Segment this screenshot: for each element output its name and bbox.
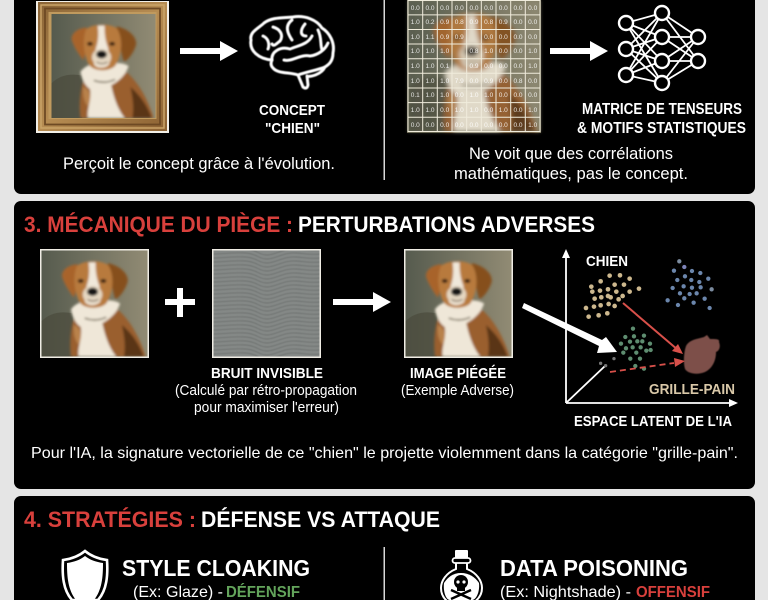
tensor matrix over dog: 0.0 xyxy=(499,122,508,129)
tensor matrix over dog: 0.8 xyxy=(455,19,464,26)
tensor matrix over dog: 1.0 xyxy=(469,92,479,99)
tensor matrix over dog: 0.0 xyxy=(484,34,494,41)
tensor matrix over dog: 1.0 xyxy=(411,107,420,114)
tensor matrix over dog: 0.0 xyxy=(411,122,420,129)
label: latent space: ESPACE LATENT DE L'IA xyxy=(574,413,732,430)
tensor matrix over dog: 0.0 xyxy=(499,92,508,99)
tensor matrix over dog: 0.0 xyxy=(440,107,450,114)
tensor matrix over dog: 1.0 xyxy=(528,48,538,55)
arrow: painting to brain xyxy=(180,41,238,61)
tensor matrix over dog: 0.0 xyxy=(528,5,538,12)
tensor matrix over dog: 1.0 xyxy=(425,63,435,70)
label: concept chien xyxy=(259,102,325,137)
label: concept chien: "CHIEN" xyxy=(265,120,320,137)
label: toaster: GRILLE-PAIN xyxy=(649,382,735,398)
tensor matrix over dog: 0.9 xyxy=(469,19,479,26)
label: tensor matrix xyxy=(577,101,746,137)
framed dog painting xyxy=(36,1,169,133)
label: tensor matrix: MATRICE DE TENSEURS xyxy=(582,101,742,118)
tensor matrix over dog: 0.2 xyxy=(425,19,435,26)
label: chien cluster: CHIEN xyxy=(586,254,628,270)
cluster: blue dots xyxy=(665,259,714,310)
arrow: red trajectory xyxy=(623,303,683,354)
tensor matrix over dog: 0.0 xyxy=(513,5,523,12)
tensor matrix over dog: 1.0 xyxy=(484,92,494,99)
icon: poison flask xyxy=(441,550,482,600)
arrow: dashed red trajectory xyxy=(610,358,685,372)
text: machine perception xyxy=(454,144,688,183)
tensor matrix over dog: 0.0 xyxy=(528,19,538,26)
icon: brain xyxy=(251,17,333,88)
tensor matrix over dog: 0.0 xyxy=(484,122,494,129)
text: human perception: Perçoit le concept grâce à l'évolution. xyxy=(63,154,335,173)
tensor matrix over dog: 0.9 xyxy=(499,19,508,26)
icon: neural network xyxy=(619,6,705,90)
tensor matrix over dog: 0.9 xyxy=(469,63,479,70)
panel: strategies xyxy=(14,496,755,600)
tensor matrix over dog: 0.0 xyxy=(499,5,508,12)
tensor matrix over dog: 0.0 xyxy=(528,78,538,85)
tensor matrix over dog: 1.0 xyxy=(484,48,494,55)
tensor matrix over dog: 1.0 xyxy=(440,78,450,85)
heading: section 3 xyxy=(24,212,595,237)
icon: shield xyxy=(63,551,107,600)
text: data poisoning: DATA POISONING xyxy=(500,555,688,581)
tensor matrix over dog: 1.0 xyxy=(411,48,420,55)
tensor matrix over dog: 0.0 xyxy=(455,92,464,99)
trapped dog image xyxy=(404,249,513,358)
label: trapped image: (Exemple Adverse) xyxy=(401,383,514,399)
tensor matrix over dog: 0.0 xyxy=(513,122,523,129)
arrow: matrix to network xyxy=(550,41,608,61)
label: concept chien: CONCEPT xyxy=(259,102,325,119)
tensor matrix over dog: 1.0 xyxy=(469,107,479,114)
tensor matrix over dog: 0.8 xyxy=(469,48,479,55)
tensor matrix over dog: 0.9 xyxy=(484,78,494,85)
tensor matrix over dog: 0.0 xyxy=(411,5,420,12)
tensor matrix over dog: 0.0 xyxy=(484,5,494,12)
text: machine perception: mathématiques, pas le concept. xyxy=(454,164,688,183)
text: style cloaking: STYLE CLOAKING xyxy=(122,555,310,581)
tensor matrix over dog: 0.9 xyxy=(440,19,450,26)
tensor matrix over dog: 0.0 xyxy=(469,122,479,129)
label: invisible noise: pour maximiser l'erreur) xyxy=(194,400,339,416)
tensor matrix over dog: 0.1 xyxy=(411,92,420,99)
label: invisible noise xyxy=(175,366,357,416)
heading: section 4: 4. STRATÉGIES : xyxy=(24,507,196,532)
tensor matrix over dog: 0.8 xyxy=(513,78,523,85)
axes xyxy=(566,252,736,403)
tensor matrix over dog: 0.0 xyxy=(455,122,464,129)
tensor matrix over dog: 0.0 xyxy=(499,63,508,70)
tensor matrix over dog: 0.0 xyxy=(513,92,523,99)
tensor matrix over dog: 0.8 xyxy=(484,19,494,26)
tensor matrix over dog: 1.0 xyxy=(411,78,420,85)
cluster: green dots xyxy=(599,326,653,371)
tensor matrix over dog: 0.0 xyxy=(528,92,538,99)
tensor matrix over dog: 1.0 xyxy=(440,48,450,55)
text: caption: Pour l'IA, la signature vectorielle de ce "chien" le projette violemment dans la catégorie "grille-pain". xyxy=(31,445,738,462)
tensor matrix over dog: 0.0 xyxy=(440,122,450,129)
tensor matrix over dog: 1.0 xyxy=(499,107,508,114)
tensor matrix over dog: 0.0 xyxy=(425,5,435,12)
panel: perception comparison xyxy=(14,0,755,194)
tensor matrix over dog: 1.0 xyxy=(455,107,464,114)
tensor matrix over dog: 1.0 xyxy=(440,92,450,99)
tensor matrix over dog: 1.0 xyxy=(425,107,435,114)
tensor matrix over dog: 1.0 xyxy=(425,48,435,55)
panel: trap mechanics xyxy=(14,201,755,489)
label: invisible noise: BRUIT INVISIBLE xyxy=(211,366,323,382)
tensor matrix over dog: 1.0 xyxy=(411,19,420,26)
tensor matrix over dog: 0.0 xyxy=(513,63,523,70)
tensor matrix over dog xyxy=(407,0,541,133)
tensor matrix over dog: 1.0 xyxy=(528,63,538,70)
tensor matrix over dog: 0.0 xyxy=(513,19,523,26)
tensor matrix over dog: 0.0 xyxy=(513,34,523,41)
tensor matrix over dog: 0.1 xyxy=(440,63,450,70)
tensor matrix over dog: 0.0 xyxy=(499,48,508,55)
tensor matrix over dog: 7.9 xyxy=(455,78,464,85)
label: invisible noise: (Calculé par rétro-propagation xyxy=(175,383,357,399)
tensor matrix over dog: 0.0 xyxy=(513,107,523,114)
label: trapped image: IMAGE PIÉGÉE xyxy=(410,365,506,382)
text: style cloaking xyxy=(122,555,310,600)
tensor matrix over dog: 1.1 xyxy=(425,34,435,41)
tensor matrix over dog: 1.0 xyxy=(425,78,435,85)
label: trapped image xyxy=(401,365,514,399)
tensor matrix over dog: 0.0 xyxy=(484,107,494,114)
tensor matrix over dog: 1.0 xyxy=(425,92,435,99)
tensor matrix over dog: 0.0 xyxy=(499,34,508,41)
text: machine perception: Ne voit que des corrélations xyxy=(469,144,673,163)
invisible noise image xyxy=(212,249,321,359)
heading: section 3: 3. MÉCANIQUE DU PIÈGE : xyxy=(24,212,293,237)
tensor matrix over dog: 1.0 xyxy=(411,63,420,70)
heading: section 4: DÉFENSE VS ATTAQUE xyxy=(201,507,440,532)
tensor matrix over dog: 0.0 xyxy=(469,5,479,12)
tensor matrix over dog: 1.0 xyxy=(411,34,420,41)
tensor matrix over dog: 1.0 xyxy=(528,107,538,114)
heading: section 4 xyxy=(24,507,440,532)
icon: plus xyxy=(165,288,195,317)
icon: toaster blob xyxy=(684,335,720,374)
cluster: tan dots xyxy=(584,273,641,319)
tensor matrix over dog: 0.0 xyxy=(425,122,435,129)
tensor matrix over dog: 0.0 xyxy=(440,5,450,12)
tensor matrix over dog: 0.9 xyxy=(455,34,464,41)
tensor matrix over dog: 0.0 xyxy=(499,78,508,85)
chart: latent space xyxy=(522,249,738,430)
heading: section 3: PERTURBATIONS ADVERSES xyxy=(298,212,595,237)
tensor matrix over dog: 0.0 xyxy=(528,34,538,41)
tensor matrix over dog: 0.9 xyxy=(440,34,450,41)
arrow: noise to trapped image xyxy=(333,292,391,312)
tensor matrix over dog: 1.0 xyxy=(528,122,538,129)
arrow: big white pointer xyxy=(522,303,617,353)
tensor matrix over dog: 0.0 xyxy=(455,5,464,12)
original dog image xyxy=(40,249,149,358)
label: tensor matrix: & MOTIFS STATISTIQUES xyxy=(577,120,746,137)
tensor matrix over dog: 0.0 xyxy=(469,78,479,85)
tensor matrix over dog: 0.0 xyxy=(484,63,494,70)
tensor matrix over dog: 0.0 xyxy=(513,48,523,55)
text: data poisoning xyxy=(500,555,710,600)
